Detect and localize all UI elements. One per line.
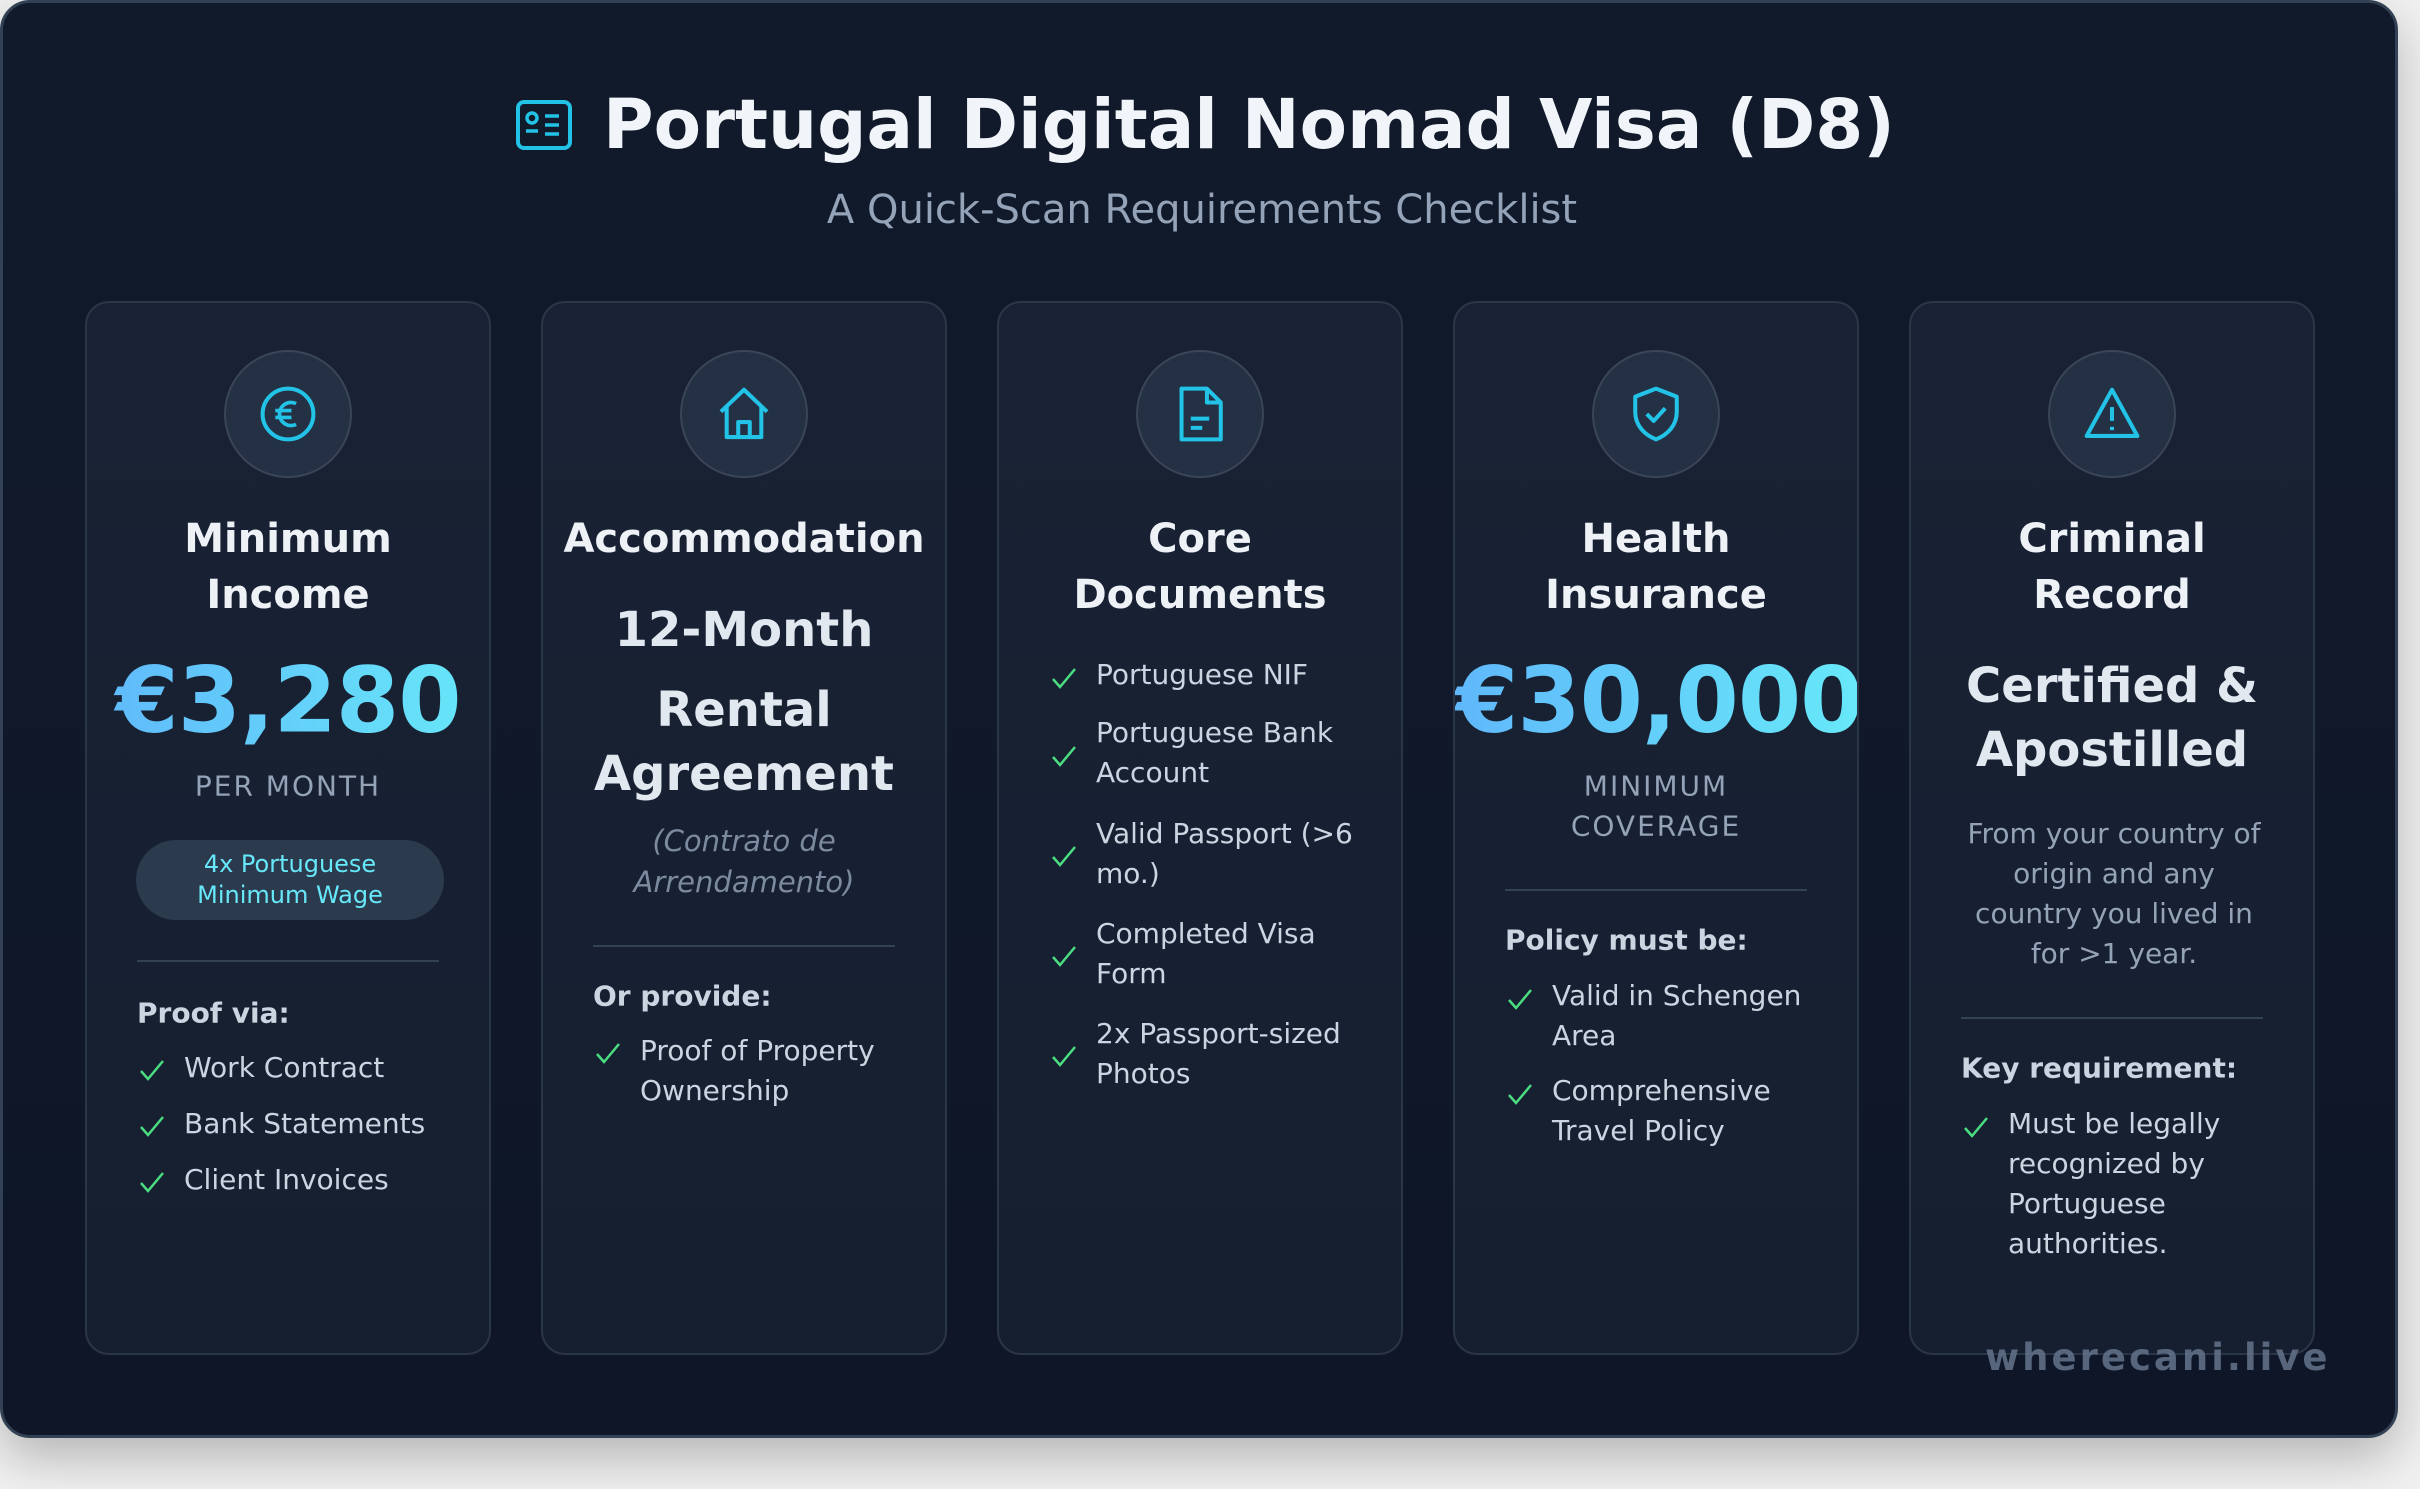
list: or provide (593, 980, 875, 1107)
description: country you lived in (1975, 897, 2253, 930)
panel: health insurance: Health (1582, 516, 1730, 562)
panel: minimum income: Income (206, 572, 370, 618)
list: key requirement: recognized by (2008, 1147, 2205, 1180)
pill: Minimum Wage (197, 881, 383, 909)
list: documents: Form (1096, 957, 1167, 990)
list: policy: Policy must be: (1505, 924, 1748, 956)
value: €3,280 (115, 648, 461, 754)
list: policy (1505, 924, 1801, 1147)
list: proof: Proof via: (137, 996, 290, 1030)
list: documents: Account (1096, 756, 1209, 789)
description (1967, 817, 2261, 970)
list: or provide: Or provide: (593, 980, 772, 1012)
icon: euro (224, 350, 352, 478)
panel: minimum income: PER MONTH (195, 770, 381, 802)
title: Portugal Digital Nomad Visa (D8) (603, 85, 1895, 165)
list: documents: Valid Passport (>6 (1096, 817, 1353, 850)
subtitle: A Quick-Scan Requirements Checklist (827, 187, 1577, 233)
panel: criminal record: Apostilled (1976, 722, 2248, 778)
panel: accommodation: Arrendamento) (634, 865, 854, 899)
value: €30,000 (1455, 648, 1862, 754)
panel: core documents: Core (1148, 516, 1252, 562)
panel: core documents (997, 301, 1403, 1355)
list: key requirement (1961, 1052, 2237, 1260)
panel: accommodation: 12-Month (615, 602, 873, 658)
panel: accommodation (541, 301, 947, 1355)
list: policy: Valid in Schengen (1552, 979, 1801, 1012)
panel: accommodation: Agreement (594, 746, 894, 802)
list: documents (1052, 658, 1353, 1090)
panel: health insurance: COVERAGE (1571, 810, 1741, 842)
panel: accommodation: (Contrato de (652, 824, 836, 858)
panel: minimum income (85, 301, 491, 1355)
panel: criminal record: Criminal (2018, 516, 2206, 562)
list: policy: Comprehensive (1552, 1074, 1771, 1107)
list: proof (137, 996, 425, 1196)
list: key requirement: Portuguese (2008, 1187, 2166, 1220)
panel: criminal record: Certified & (1966, 658, 2258, 714)
list: proof: Work Contract (184, 1051, 384, 1084)
description: for >1 year. (2031, 937, 2197, 970)
list: documents: mo.) (1096, 857, 1160, 890)
panel: health insurance: MINIMUM (1584, 770, 1728, 802)
list: policy: Area (1552, 1019, 1616, 1052)
pill (136, 840, 444, 920)
watermark: wherecani.live (1985, 1336, 2331, 1379)
panel: health insurance: Insurance (1545, 572, 1767, 618)
panel: accommodation: Rental (656, 682, 832, 738)
icon: document (1136, 350, 1264, 478)
list: proof: Client Invoices (184, 1163, 389, 1196)
panel: health insurance (1453, 301, 1859, 1355)
list: documents: Portuguese NIF (1096, 658, 1308, 691)
pill: 4x Portuguese (204, 850, 376, 878)
list: or provide: Ownership (640, 1074, 789, 1107)
panel: accommodation: Accommodation (563, 516, 925, 562)
header (516, 85, 1895, 233)
list: key requirement: Key requirement: (1961, 1052, 2237, 1084)
panel: minimum income: Minimum (184, 516, 392, 562)
icon: house (680, 350, 808, 478)
icon: warning (2048, 350, 2176, 478)
description: From your country of (1967, 817, 2261, 850)
description: origin and any (2013, 857, 2215, 890)
panel: criminal record (1909, 301, 2315, 1355)
list: documents: Photos (1096, 1057, 1190, 1090)
panel: criminal record: Record (2033, 572, 2191, 618)
icon: id card (516, 100, 572, 150)
list: or provide: Proof of Property (640, 1034, 875, 1067)
list: policy: Travel Policy (1552, 1114, 1725, 1147)
list: documents: Completed Visa (1096, 917, 1316, 950)
list: documents: 2x Passport-sized (1096, 1017, 1341, 1050)
list: documents: Portuguese Bank (1096, 716, 1333, 749)
panel: core documents: Documents (1073, 572, 1327, 618)
list: proof: Bank Statements (184, 1107, 425, 1140)
list: key requirement: authorities. (2008, 1227, 2168, 1260)
list: key requirement: Must be legally (2008, 1107, 2220, 1140)
icon: shield (1592, 350, 1720, 478)
